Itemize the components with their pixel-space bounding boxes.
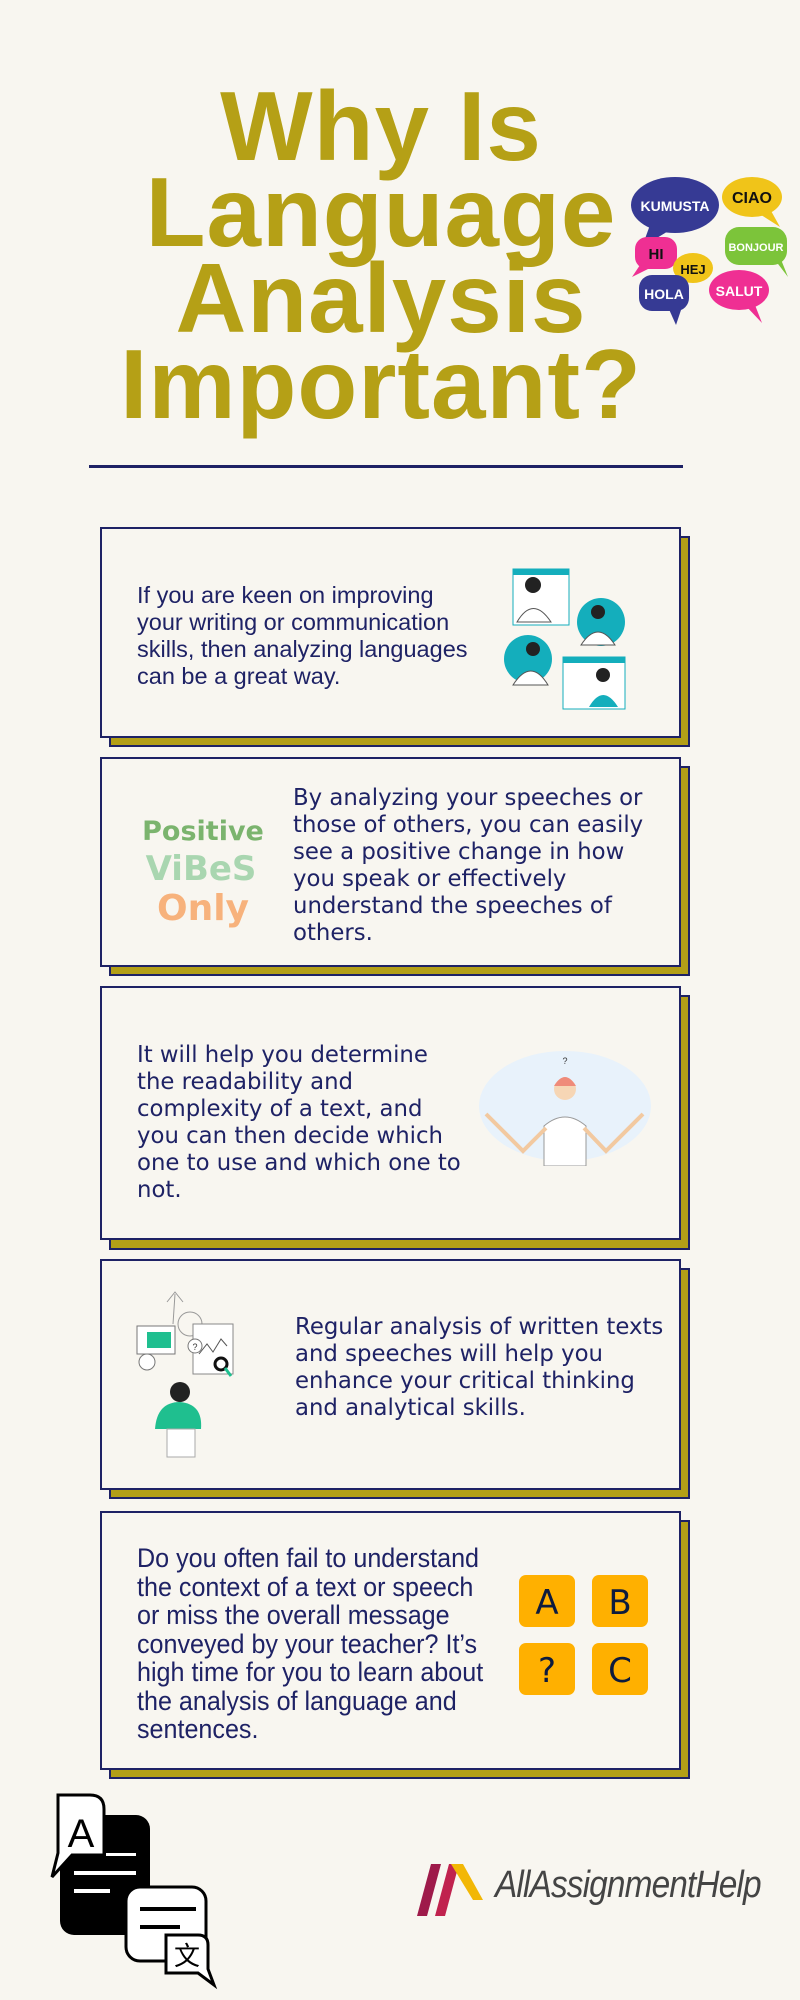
text block: card 5: conveyed by your teacher? It’s — [137, 1628, 477, 1658]
text block: card 4: and speeches will help you — [295, 1341, 603, 1367]
text block: card 5: high time for you to learn about — [137, 1657, 483, 1687]
text block: card 4: enhance your critical thinking — [295, 1368, 635, 1394]
text block: card 5 — [137, 1543, 484, 1744]
text block: card 2: others. — [293, 920, 373, 946]
icon: language speech bubbles: HI — [648, 246, 664, 263]
icon: ABC quiz tiles: A — [535, 1583, 559, 1623]
text block: card 1: skills, then analyzing languages — [137, 636, 468, 662]
title: Why Is — [220, 71, 542, 181]
text block: card 5: Do you often fail to understand — [137, 1543, 479, 1573]
text block: card 2 — [293, 785, 643, 946]
icon: translation bubbles — [50, 1794, 218, 1990]
text block: card 5: or miss the overall message — [137, 1600, 450, 1630]
text block: card 3: not. — [137, 1177, 182, 1203]
icon: language speech bubbles: KUMUSTA — [641, 198, 709, 214]
icon: ABC quiz tiles — [519, 1575, 648, 1695]
text block: card 5: sentences. — [137, 1714, 258, 1744]
icon: language speech bubbles: CIAO — [732, 190, 772, 207]
text block: card 4: and analytical skills. — [295, 1395, 526, 1421]
text block: card 1: your writing or communication — [137, 609, 449, 635]
icon: shrugging person: ? — [562, 1056, 568, 1066]
icon: ABC quiz tiles: C — [608, 1651, 632, 1691]
icon: language speech bubbles — [631, 177, 788, 325]
divider — [89, 465, 683, 468]
panel: card 2 — [100, 757, 690, 976]
text block: card 3: one to use and which one to — [137, 1150, 461, 1176]
title: Important? — [120, 329, 642, 439]
text block: card 2: you speak or effectively — [293, 866, 566, 892]
text block: card 1: can be a great way. — [137, 663, 340, 689]
panel: card 5 — [100, 1511, 690, 1779]
icon: translation bubbles: 文 — [174, 1936, 200, 1973]
text block: card 4 — [295, 1314, 663, 1421]
title — [120, 71, 642, 439]
text block: card 4: Regular analysis of written texts — [295, 1314, 663, 1340]
text block: card 3: complexity of a text, and — [137, 1096, 422, 1122]
icon: analysis woman — [136, 1291, 234, 1458]
icon: ABC quiz tiles: ? — [538, 1651, 556, 1691]
icon: ABC quiz tiles: B — [608, 1583, 632, 1623]
panel: card 3 — [100, 986, 690, 1250]
text block: card 2: understand the speeches of — [293, 893, 612, 919]
text block: card 2: By analyzing your speeches or — [293, 785, 642, 811]
text block: card 1 — [137, 582, 468, 689]
icon: positive vibes only: Positive — [142, 816, 264, 847]
icon: analysis woman: ? — [192, 1342, 198, 1352]
panel: card 4 — [100, 1259, 690, 1499]
icon: shrugging person — [479, 1051, 651, 1166]
logo: AllAssignmentHelp: AllAssignmentHelp — [495, 1864, 761, 1906]
icon: video call people — [504, 568, 626, 710]
icon: translation bubbles: A — [68, 1812, 95, 1856]
text block: card 3: It will help you determine — [137, 1042, 428, 1068]
icon: positive vibes only: Only — [157, 888, 249, 929]
text block: card 5: the context of a text or speech — [137, 1572, 473, 1602]
icon: language speech bubbles: HOLA — [644, 286, 684, 302]
icon: language speech bubbles: BONJOUR — [728, 242, 784, 254]
icon: positive vibes only — [142, 816, 264, 929]
text block: card 3: the readability and — [137, 1069, 353, 1095]
panel: card 1 — [100, 527, 690, 747]
title: Language — [146, 157, 616, 267]
text block: card 1: If you are keen on improving — [137, 582, 434, 608]
text block: card 3: you can then decide which — [137, 1123, 443, 1149]
icon: language speech bubbles: HEJ — [680, 262, 706, 277]
text block: card 2: those of others, you can easily — [293, 812, 643, 838]
icon: positive vibes only: ViBeS — [146, 849, 256, 889]
text block: card 2: see a positive change in how — [293, 839, 624, 865]
text block: card 5: the analysis of language and — [137, 1686, 457, 1716]
icon: language speech bubbles: SALUT — [716, 283, 763, 299]
text block: card 3 — [137, 1042, 461, 1203]
title: Analysis — [175, 243, 587, 353]
logo: AllAssignmentHelp — [417, 1864, 761, 1916]
